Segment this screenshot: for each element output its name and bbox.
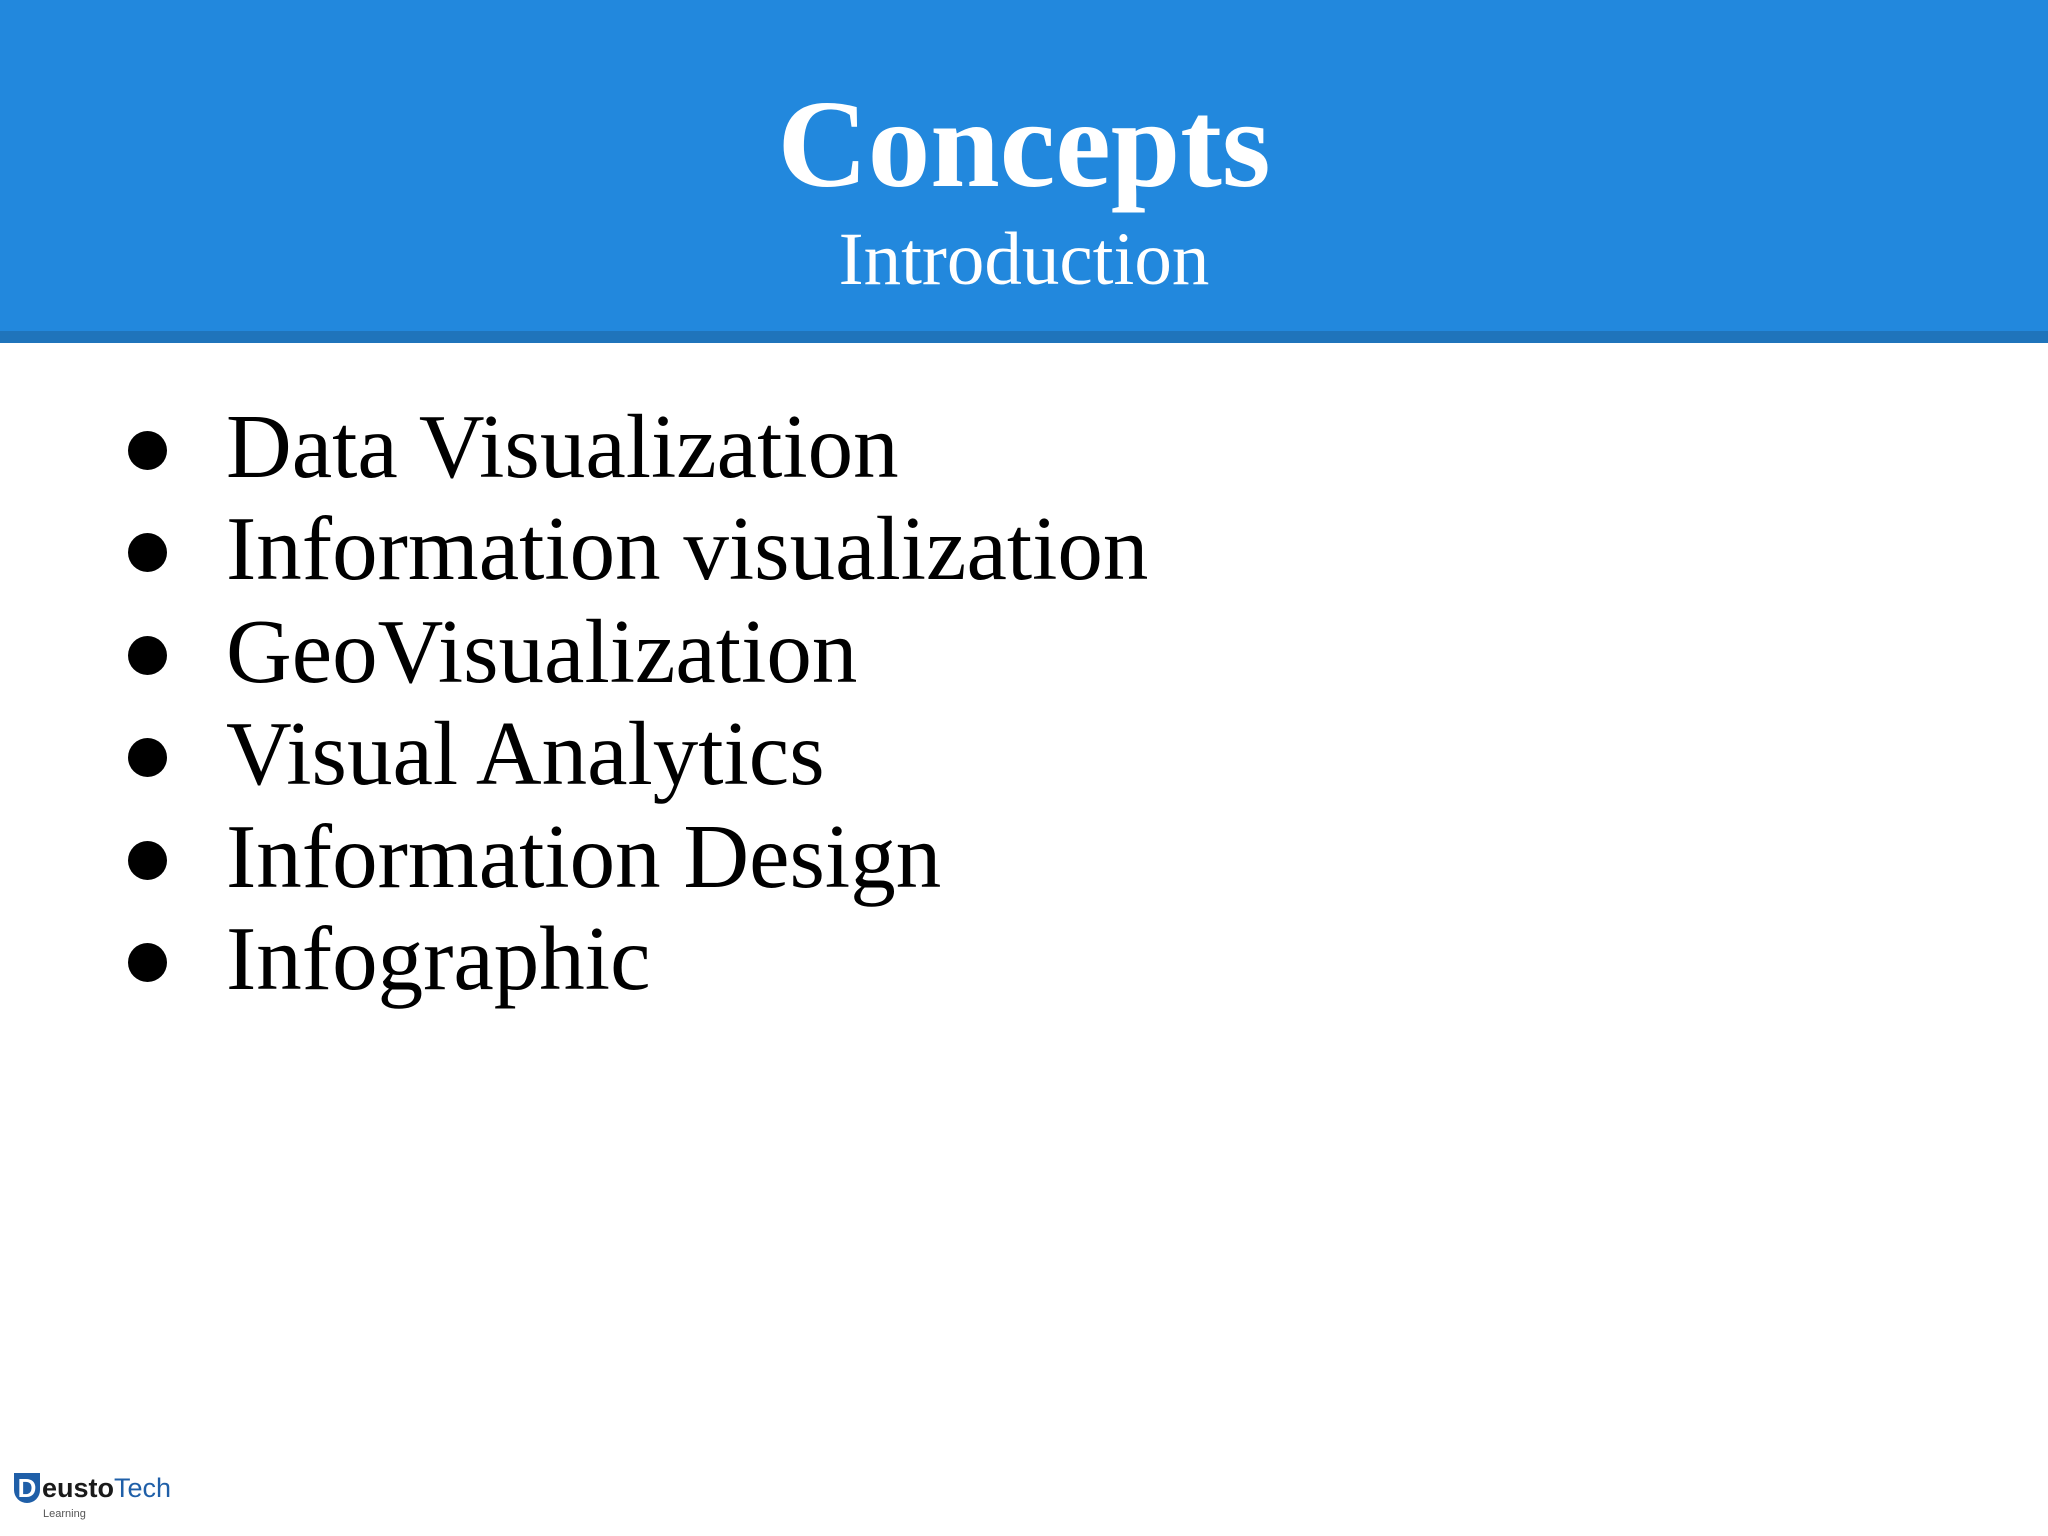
icon: shield D: D — [18, 1473, 36, 1503]
bullet list: GeoVisualization — [226, 601, 857, 702]
bullet: Infographic — [128, 908, 650, 1009]
logo: DeustoTech Learning — [14, 1473, 171, 1520]
subtitle: Introduction — [839, 218, 1209, 301]
bullet: Information Design — [128, 806, 941, 907]
bullet: GeoVisualization — [128, 601, 857, 764]
bullet list — [128, 396, 1148, 1009]
bullet: Data Visualization — [128, 396, 899, 497]
bullet list: Information visualization — [226, 498, 1148, 599]
bullet list: Infographic — [226, 908, 650, 1009]
bullet list: Visual Analytics — [226, 703, 825, 804]
header panel — [0, 0, 2048, 331]
bullet list: Data Visualization — [226, 396, 899, 497]
logo: DeustoTech Learning: Learning — [43, 1508, 86, 1520]
logo: DeustoTech Learning: eustoTech — [42, 1473, 171, 1503]
bullet list: Information Design — [226, 806, 941, 907]
bullet: Information visualization — [128, 498, 1148, 599]
title: Concepts — [777, 76, 1271, 214]
bullet: Visual Analytics — [128, 703, 825, 804]
